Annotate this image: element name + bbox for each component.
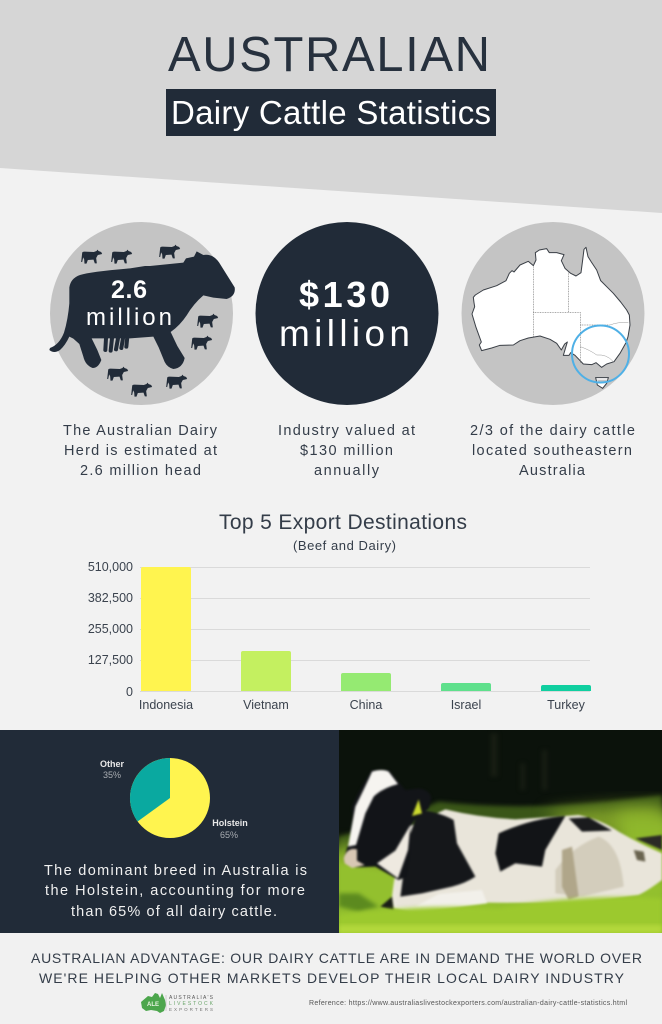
chart heading: (Beef and Dairy)	[293, 538, 396, 553]
logo: LIVESTOCK	[169, 1001, 214, 1007]
footer message	[31, 950, 642, 986]
logo: EXPORTERS	[169, 1007, 213, 1012]
breed text: The dominant breed in Australia is	[44, 863, 307, 879]
caption	[278, 423, 415, 479]
x axis labels	[139, 698, 586, 712]
icon: grey circle	[50, 222, 233, 405]
logo: AUSTRALIA'S	[169, 995, 214, 1001]
stat: $130 million	[279, 274, 410, 354]
footer band	[0, 933, 662, 1024]
caption: 2.6 million head	[80, 463, 201, 479]
footer message: AUSTRALIAN ADVANTAGE: OUR DAIRY CATTLE ARE IN DEMAND THE WORLD OVER	[31, 950, 642, 966]
reference: Reference: https://www.australiaslivestockexporters.com/australian-dairy-cattle-statistics.html	[309, 1000, 627, 1007]
pie chart	[130, 758, 210, 838]
x axis labels: China	[350, 698, 382, 712]
caption: Industry valued at	[278, 423, 415, 439]
caption: $130 million	[300, 443, 393, 459]
x axis labels: Israel	[451, 698, 481, 712]
stat: $130 million: million	[279, 313, 410, 354]
map of Australia	[472, 247, 630, 388]
chart heading	[219, 511, 467, 553]
caption: located southeastern	[472, 443, 632, 459]
icon: logo map	[141, 993, 166, 1013]
bar chart	[88, 560, 591, 712]
pie labels: Holstein	[212, 818, 248, 828]
pie labels: Other	[100, 759, 124, 769]
header band	[0, 0, 662, 213]
x axis labels: Indonesia	[139, 698, 193, 712]
logo	[141, 993, 214, 1013]
pie labels	[100, 759, 248, 840]
icon: dark circle	[256, 222, 438, 405]
caption	[63, 423, 218, 479]
pie labels: 65%	[220, 830, 238, 840]
x axis labels: Turkey	[547, 698, 586, 712]
bars	[141, 567, 591, 691]
caption: Australia	[519, 463, 586, 479]
panel: location	[462, 222, 644, 479]
stat: $130 million: $130	[299, 274, 390, 315]
y axis labels	[88, 560, 133, 699]
title: AUSTRALIAN	[168, 28, 490, 82]
caption: The Australian Dairy	[63, 423, 218, 439]
y axis labels: 127,500	[88, 653, 133, 667]
icons: small cows	[81, 245, 218, 397]
logo: ALE	[147, 1002, 159, 1008]
breed text: than 65% of all dairy cattle.	[71, 904, 277, 920]
caption	[470, 423, 635, 479]
highlight circle	[572, 326, 629, 382]
footer message: WE'RE HELPING OTHER MARKETS DEVELOP THEIR LOCAL DAIRY INDUSTRY	[39, 970, 625, 986]
stat: 2.6 million	[86, 276, 172, 331]
caption: annually	[314, 463, 380, 479]
panel: breed	[0, 730, 339, 933]
y axis labels: 255,000	[88, 622, 133, 636]
panel: industry value	[256, 222, 438, 479]
panel: herd size	[49, 222, 235, 479]
y axis labels: 510,000	[88, 560, 133, 574]
chart heading: Top 5 Export Destinations	[219, 511, 467, 534]
icon: grey circle	[462, 222, 644, 405]
breed text: the Holstein, accounting for more	[45, 883, 305, 899]
head	[344, 770, 431, 880]
stat: 2.6 million: 2.6	[111, 276, 147, 304]
y axis labels: 0	[126, 685, 133, 699]
caption: 2/3 of the dairy cattle	[470, 423, 635, 439]
subtitle box: Dairy Cattle Statistics	[171, 94, 491, 131]
icon: large cow	[49, 251, 235, 369]
stat: 2.6 million: million	[86, 304, 172, 331]
breed text	[44, 863, 307, 920]
photo: Holstein cow on grass	[339, 730, 662, 933]
y axis labels: 382,500	[88, 591, 133, 605]
pie labels: 35%	[103, 770, 121, 780]
body	[392, 809, 662, 913]
caption: Herd is estimated at	[64, 443, 217, 459]
x axis labels: Vietnam	[243, 698, 289, 712]
